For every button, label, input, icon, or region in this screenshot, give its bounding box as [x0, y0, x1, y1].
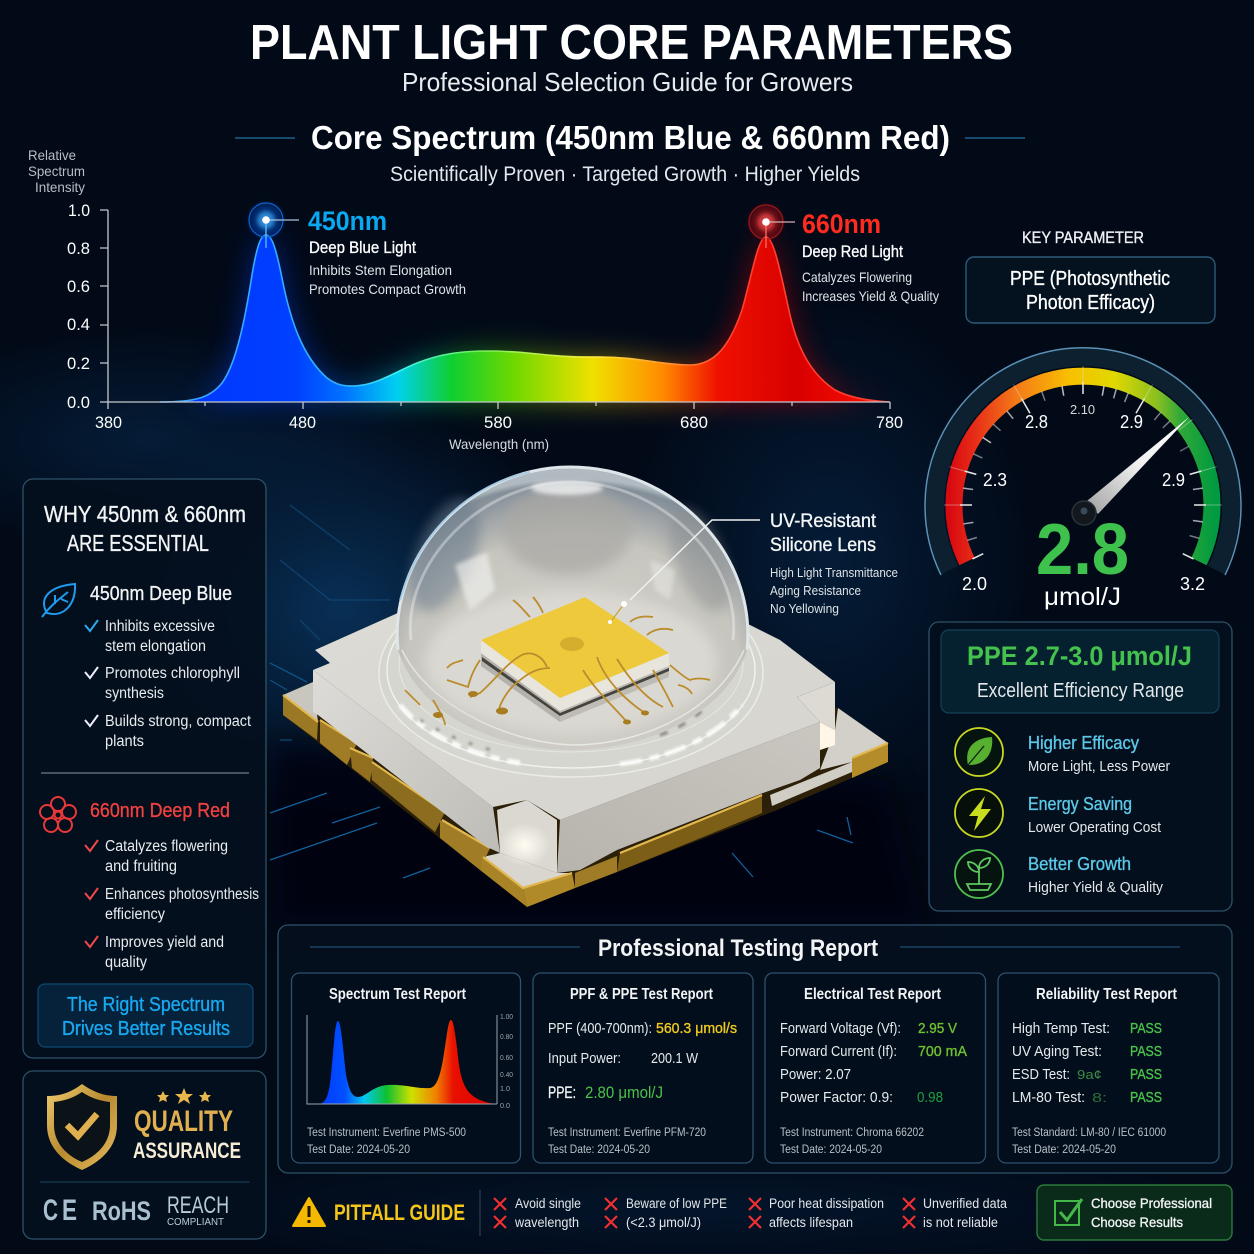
benefit: energy saving [955, 789, 1161, 837]
card: reliability test report: PASS [1130, 1020, 1162, 1037]
card: electrical test report [765, 973, 986, 1163]
x axis labels: 480 [289, 413, 316, 432]
gold bond pads [433, 691, 649, 724]
gold side blocks [283, 695, 888, 907]
660nm benefits list: efficiency [105, 906, 165, 923]
card: PPF and PPE test report: PPF & PPE Test Report [570, 986, 713, 1003]
PPE gauge [925, 348, 1241, 611]
icon: blue leaf [42, 584, 75, 617]
panel heading: ARE ESSENTIAL [67, 530, 209, 556]
660nm peak marker [749, 205, 795, 248]
450nm heading: 450nm Deep Blue [90, 583, 232, 605]
lens callout text: High Light Transmittance [770, 565, 898, 580]
x axis labels: 380 [95, 413, 122, 432]
card: reliability test report [998, 973, 1219, 1163]
callout: choose professional: Choose Professional [1091, 1195, 1212, 1211]
gauge labels [962, 402, 1205, 594]
key parameter box: Photon Efficacy) [1026, 292, 1155, 314]
card: electrical test report: Power Factor: 0.9: [780, 1089, 893, 1106]
section heading: core spectrum: Core Spectrum (450nm Blue & 660nm Red) [311, 119, 950, 156]
card: reliability test report: Test Standard: LM-80 / IEC 61000 [1012, 1127, 1166, 1139]
card: reliability test report: ESD Test: [1012, 1066, 1070, 1083]
mini spectrum chart: 0.40 [500, 1072, 513, 1079]
450nm benefits list: synthesis [105, 685, 164, 702]
lens callout text [770, 511, 898, 616]
gauge labels: 2.8 [1025, 412, 1048, 432]
card: reliability test report: PASS [1130, 1043, 1162, 1060]
card: electrical test report: Electrical Test Report [804, 986, 941, 1003]
pitfall: low PPE: (<2.3 μmol/J) [626, 1215, 701, 1230]
benefit: better growth: Better Growth [1028, 854, 1131, 874]
660nm benefits list: and fruiting [105, 858, 177, 875]
card: PPF and PPE test report: 560.3 μmol/s [656, 1020, 737, 1037]
450nm callout: Inhibits Stem Elongation [309, 262, 452, 278]
card: spectrum test report: Spectrum Test Report [329, 986, 466, 1003]
x axis labels: 780 [876, 413, 903, 432]
y axis labels: 0.8 [67, 239, 90, 258]
pitfall: poor heat dissipation: Poor heat dissipation [769, 1196, 884, 1211]
callout: right spectrum: Drives Better Results [62, 1018, 230, 1040]
card: reliability test report: Reliability Test Report [1036, 986, 1177, 1003]
certification marks: REACH [167, 1192, 229, 1219]
card: reliability test report: 9a¢ [1077, 1067, 1102, 1082]
lens callout text: Aging Resistance [770, 583, 861, 598]
panel: PPE range and benefits [929, 622, 1232, 911]
certification marks: COMPLIANT [167, 1216, 225, 1228]
card: PPF and PPE test report: PPE: [548, 1084, 576, 1102]
card: PPF and PPE test report: Test Instrument: Everfine PFM-720 [548, 1127, 706, 1139]
yellow LED chip [481, 597, 669, 722]
PPE range box: PPE 2.7-3.0 μmol/J [967, 641, 1192, 671]
gauge value: 2.8 [1036, 510, 1129, 590]
key parameter box [966, 257, 1215, 323]
card: PPF and PPE test report: 200.1 W [651, 1050, 699, 1067]
section tagline: Scientifically Proven · Targeted Growth · Higher Yields [390, 163, 860, 186]
450nm callout: Promotes Compact Growth [309, 281, 466, 297]
pitfall: poor heat dissipation: affects lifespan [769, 1215, 853, 1230]
450nm benefits list [85, 618, 252, 750]
lens callout text: UV-Resistant [770, 511, 877, 532]
gauge labels: 3.2 [1180, 574, 1205, 594]
panel heading [44, 501, 246, 556]
panel heading: WHY 450nm & 660nm [44, 501, 246, 527]
pitfall: unverified data [903, 1196, 1007, 1230]
450nm benefits list: stem elongation [105, 638, 206, 655]
gauge labels: 2.0 [962, 574, 987, 594]
panel: why 450nm and 660nm [23, 479, 266, 1058]
LED chip illustration [283, 467, 898, 907]
660nm callout: Increases Yield & Quality [802, 288, 939, 304]
card: reliability test report: High Temp Test: [1012, 1020, 1110, 1037]
card: reliability test report: PASS [1130, 1066, 1162, 1083]
card: spectrum test report [292, 973, 520, 1163]
benefit: energy saving: Lower Operating Cost [1028, 820, 1161, 836]
benefit: better growth: Higher Yield & Quality [1028, 880, 1164, 896]
mini spectrum chart: 1.0 [500, 1086, 510, 1093]
pitfall: unverified data: Unverified data [923, 1196, 1007, 1211]
card: PPF and PPE test report [533, 973, 753, 1163]
660nm callout: Deep Red Light [802, 243, 903, 261]
mini spectrum chart: 1.00 [500, 1014, 513, 1021]
key parameter label: KEY PARAMETER [1022, 228, 1144, 247]
gauge labels: 2.9 [1120, 412, 1143, 432]
spectrum curve [160, 235, 890, 402]
y axis title: Relative [28, 147, 76, 163]
pitfall guide [293, 1185, 1232, 1240]
pitfall: single wavelength [494, 1196, 581, 1230]
660nm heading: 660nm Deep Red [90, 800, 230, 822]
panel: quality assurance: ASSURANCE [133, 1138, 241, 1163]
icon: gold shield [47, 1084, 117, 1170]
callout: choose professional [1037, 1185, 1232, 1240]
x axis labels: 580 [484, 413, 512, 432]
report heading: Professional Testing Report [598, 935, 878, 962]
gauge unit: μmol/J [1044, 583, 1121, 611]
mini spectrum chart: 0.60 [500, 1055, 513, 1062]
card: electrical test report: Forward Voltage (Vf): [780, 1020, 901, 1037]
450nm benefits list: Promotes chlorophyll [105, 665, 240, 682]
card: reliability test report: Test Date: 2024-05-20 [1012, 1144, 1116, 1156]
mini spectrum chart: 0.80 [500, 1034, 513, 1041]
lens callout text: Silicone Lens [770, 535, 876, 556]
gold base [283, 682, 888, 907]
icon: red flower [40, 797, 76, 832]
gauge ticks [944, 366, 1222, 559]
spectrum chart [28, 147, 939, 452]
PPE range box [941, 630, 1219, 713]
axes [100, 210, 890, 409]
lens dome [397, 467, 748, 750]
450nm benefits list: Builds strong, compact [105, 713, 252, 730]
icon: stars [157, 1088, 211, 1104]
660nm benefits list: Catalyzes flowering [105, 838, 228, 855]
y axis title: Intensity [35, 179, 85, 195]
benefit: better growth [955, 850, 1164, 898]
lens floor [425, 592, 717, 732]
callout: choose professional: Choose Results [1091, 1214, 1183, 1230]
pitfall: unverified data: is not reliable [923, 1215, 998, 1230]
certification marks: C [43, 1194, 58, 1227]
y axis labels: 0.2 [67, 354, 90, 373]
660nm benefits list: Improves yield and [105, 934, 224, 951]
benefit: higher efficacy: More Light, Less Power [1028, 759, 1170, 775]
benefit: higher efficacy [955, 728, 1170, 776]
card: electrical test report: Test Date: 2024-05-20 [780, 1144, 882, 1156]
y axis title: Spectrum [28, 163, 85, 179]
lens callout line [608, 520, 760, 624]
660nm benefits list: quality [105, 954, 147, 971]
450nm callout: Deep Blue Light [309, 239, 416, 257]
pitfall heading: PITFALL GUIDE [334, 1200, 465, 1225]
y axis labels [67, 201, 90, 412]
660nm callout: Catalyzes Flowering [802, 269, 912, 285]
card: reliability test report: UV Aging Test: [1012, 1043, 1102, 1060]
card: PPF and PPE test report: Test Date: 2024-05-20 [548, 1144, 650, 1156]
certification marks [43, 1192, 229, 1228]
card: PPF and PPE test report: 2.80 μmol/J [585, 1084, 663, 1102]
mini spectrum chart: 0.0 [500, 1103, 510, 1110]
x axis labels: 680 [680, 413, 708, 432]
benefit: higher efficacy: Higher Efficacy [1028, 733, 1139, 753]
title: PLANT LIGHT CORE PARAMETERS [250, 16, 1013, 70]
pitfall: single wavelength: wavelength [514, 1215, 579, 1230]
450nm callout [308, 206, 466, 297]
450nm benefits list: Inhibits excessive [105, 618, 215, 635]
660nm callout [802, 209, 939, 304]
quality text: QUALITY [134, 1105, 233, 1138]
660nm benefits list [85, 838, 259, 971]
450nm benefits list: plants [105, 733, 144, 750]
benefit: energy saving: Energy Saving [1028, 794, 1132, 814]
callout: right spectrum: The Right Spectrum [67, 994, 225, 1016]
card: reliability test report: LM-80 Test: [1012, 1089, 1085, 1106]
card: electrical test report: 0.98 [917, 1089, 943, 1106]
callout: right spectrum [38, 984, 253, 1047]
card: electrical test report: Power: 2.07 [780, 1066, 851, 1083]
card: spectrum test report: Test Date: 2024-05-20 [307, 1144, 410, 1156]
y axis labels: 1.0 [68, 201, 90, 220]
panel: quality assurance [23, 1071, 266, 1239]
lens callout text: No Yellowing [770, 601, 839, 616]
pitfall: low PPE [605, 1196, 727, 1230]
key parameter box: PPE (Photosynthetic [1010, 268, 1170, 290]
gauge needle [1072, 417, 1189, 525]
pitfall: low PPE: Beware of low PPE [626, 1196, 727, 1211]
y axis labels: 0.0 [67, 393, 90, 412]
module body [313, 560, 835, 873]
card: electrical test report: 2.95 V [918, 1020, 957, 1037]
x axis labels [95, 413, 903, 432]
PPE range box: Excellent Efficiency Range [977, 680, 1184, 702]
lens base ring [379, 569, 763, 777]
card: reliability test report: 8: [1092, 1090, 1107, 1105]
660nm benefits list: Enhances photosynthesis [105, 886, 259, 903]
gauge ring [925, 348, 1241, 575]
certification marks: RoHS [92, 1196, 151, 1226]
card: PPF and PPE test report: PPF (400-700nm): [548, 1020, 652, 1037]
450nm peak marker [249, 203, 299, 248]
panel: professional testing report [278, 925, 1232, 1173]
card: electrical test report: Forward Current (If): [780, 1043, 897, 1060]
gauge labels: 2.3 [983, 470, 1007, 490]
card: electrical test report: Test Instrument: Chroma 66202 [780, 1127, 924, 1139]
pitfall: single wavelength: Avoid single [515, 1196, 581, 1211]
pitfall: poor heat dissipation [749, 1196, 884, 1230]
card: electrical test report: 700 mA [918, 1043, 967, 1060]
gauge labels: 2.9 [1162, 470, 1185, 490]
gauge labels: 2.10 [1070, 402, 1095, 417]
y axis title [28, 147, 85, 195]
icon: warning triangle [293, 1198, 325, 1226]
certification marks: E [62, 1194, 77, 1227]
mini spectrum chart [307, 1014, 513, 1110]
card: spectrum test report: Test Instrument: Everfine PMS-500 [307, 1127, 466, 1139]
gold bond wires [405, 597, 710, 725]
y axis labels: 0.6 [67, 277, 90, 296]
x axis title: Wavelength (nm) [449, 436, 549, 452]
card: reliability test report: PASS [1130, 1089, 1162, 1106]
card: PPF and PPE test report: Input Power: [548, 1050, 621, 1067]
660nm callout: 660nm [802, 209, 881, 239]
subtitle: Professional Selection Guide for Growers [402, 67, 853, 97]
y axis labels: 0.4 [67, 315, 90, 334]
450nm callout: 450nm [308, 206, 387, 236]
